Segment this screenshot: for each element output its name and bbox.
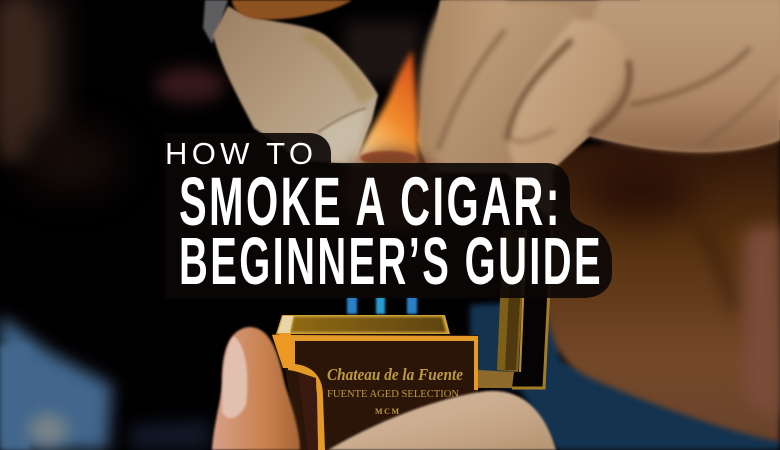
lighter engraving: MCM (375, 407, 399, 416)
glowing cigar tip (360, 151, 416, 165)
cigar tip below (342, 150, 442, 230)
hand: fingers holding cigar (417, 0, 780, 220)
third finger (507, 19, 628, 220)
lighter (272, 230, 552, 450)
palm and wrist (540, 130, 780, 442)
second finger (430, 3, 580, 172)
silver cigar band (203, 0, 228, 44)
flame (352, 50, 419, 168)
finger above cigar (232, 0, 352, 20)
blue lighter flames (347, 296, 417, 314)
thumb (212, 327, 300, 450)
title backing shape (165, 133, 612, 298)
finger creases (438, 30, 780, 150)
cigar (213, 6, 378, 165)
first finger (417, 0, 510, 172)
heading: how to: HOW TO (165, 136, 313, 171)
palm shading (585, 160, 780, 420)
lighter hinge (478, 230, 552, 388)
lighter engraving: Chateau de la Fuente (327, 365, 463, 384)
lighter engraving (327, 365, 463, 416)
thumbnail (222, 336, 247, 418)
lighter engraving: FUENTE AGED SELECTION (327, 388, 459, 400)
finger over lighter (328, 391, 556, 450)
